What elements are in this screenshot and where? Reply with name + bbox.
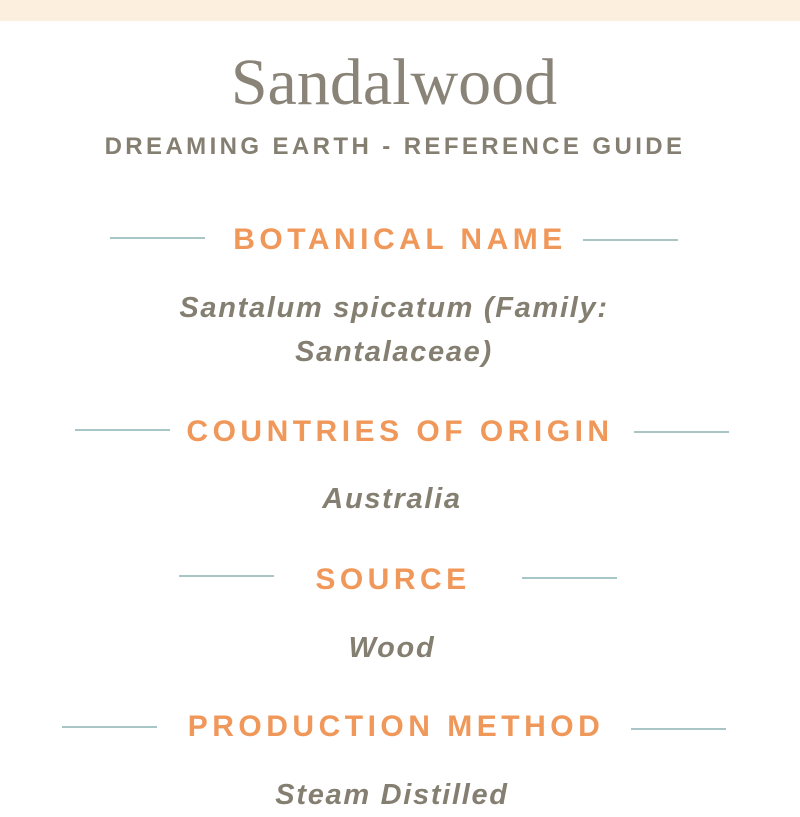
text: botanical name: Santalum spicatum (Family:: [179, 292, 609, 324]
title: Sandalwood: [231, 46, 557, 119]
text: source: Wood: [349, 632, 435, 664]
subtitle: DREAMING EARTH - REFERENCE GUIDE: [105, 133, 685, 160]
heading: source: SOURCE: [315, 563, 471, 596]
heading: production method: PRODUCTION METHOD: [188, 710, 604, 743]
text: botanical name: [179, 292, 609, 368]
text: countries: Australia: [322, 483, 462, 515]
heading: countries of origin: COUNTRIES OF ORIGIN: [186, 415, 614, 448]
top band: [0, 0, 800, 21]
text: botanical name: Santalaceae): [295, 336, 493, 368]
heading: botanical name: BOTANICAL NAME: [233, 223, 567, 256]
text: production method: Steam Distilled: [275, 779, 509, 811]
